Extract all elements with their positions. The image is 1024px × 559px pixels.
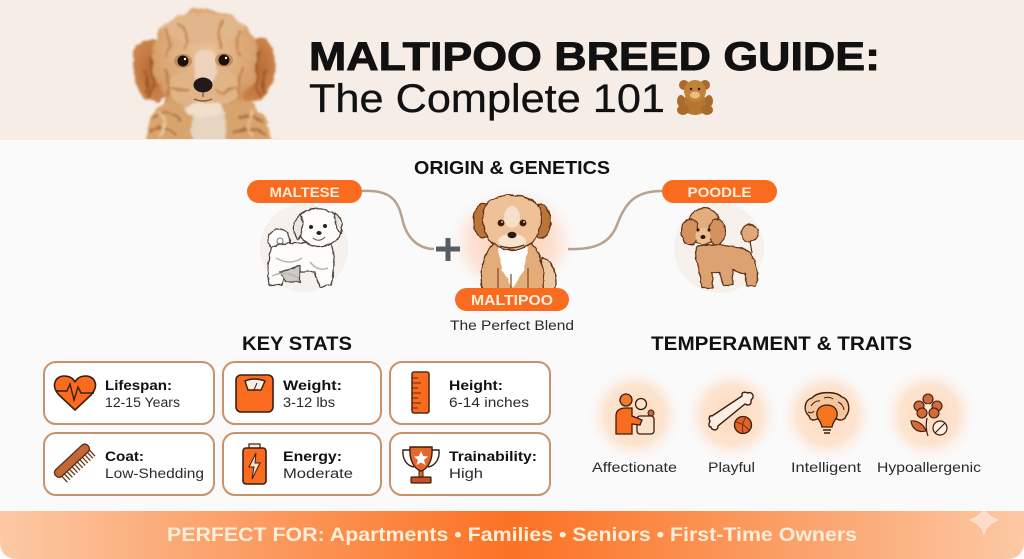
glow behind maltipoo xyxy=(452,190,574,294)
badge: maltese: MALTESE xyxy=(270,184,340,200)
icon: brain and light bulb xyxy=(787,375,867,455)
trait: intelligent: Intelligent xyxy=(791,459,861,475)
trait: affectionate: Affectionate xyxy=(592,459,677,475)
lifespan text: 12-15 Years xyxy=(105,395,180,410)
energy text xyxy=(283,448,353,481)
panel: maltese xyxy=(247,180,362,292)
icon: flower with no symbol xyxy=(889,375,969,455)
badge: poodle: POODLE xyxy=(688,184,752,200)
card: coat xyxy=(44,433,214,495)
caption: The Perfect Blend xyxy=(450,318,574,333)
icon: bone and ball xyxy=(692,375,772,455)
lifespan text xyxy=(105,377,180,410)
icon: comb xyxy=(53,442,97,485)
height text: Height: xyxy=(449,377,503,393)
lifespan text: Lifespan: xyxy=(105,377,172,393)
trait: intelligent xyxy=(787,375,867,475)
icon: trophy xyxy=(403,447,439,483)
trait: hypoallergenic: Hypoallergenic xyxy=(877,459,981,475)
plus sign xyxy=(436,238,460,261)
illustration: poodle dog xyxy=(674,203,764,293)
photo: maltipoo puppy xyxy=(129,10,279,145)
weight text: 3-12 lbs xyxy=(283,395,335,410)
trait: playful: Playful xyxy=(708,459,755,475)
trait: affectionate xyxy=(592,375,677,475)
trainability text: Trainability: xyxy=(449,448,537,464)
title: MALTIPOO BREED GUIDE: xyxy=(309,35,880,79)
icon: heart with pulse xyxy=(55,376,95,410)
energy text: Moderate xyxy=(283,466,353,481)
heading: key stats: KEY STATS xyxy=(242,334,352,355)
illustration: maltipoo dog xyxy=(474,195,556,290)
trait: playful xyxy=(692,375,772,475)
connector: maltese to plus xyxy=(362,191,434,249)
coat text xyxy=(105,448,204,481)
trainability text: High xyxy=(449,466,483,481)
height text xyxy=(449,377,529,410)
card: height xyxy=(390,362,550,424)
energy text: Energy: xyxy=(283,448,342,464)
title xyxy=(309,35,880,121)
icon: scale xyxy=(236,375,273,412)
card: energy xyxy=(223,433,381,495)
coat text: Coat: xyxy=(105,448,144,464)
heading: temperament and traits: TEMPERAMENT & TRAITS xyxy=(651,334,912,355)
heading: origin and genetics: ORIGIN & GENETICS xyxy=(414,158,610,178)
coat text: Low-Shedding xyxy=(105,466,204,481)
weight text xyxy=(283,377,342,410)
footer text: PERFECT FOR: Apartments • Families • Seniors • First-Time Owners xyxy=(167,525,857,546)
icon: battery xyxy=(243,444,266,484)
card: weight xyxy=(223,362,381,424)
trainability text xyxy=(449,448,537,481)
icon: sparkle xyxy=(968,505,1000,537)
card: trainability xyxy=(390,433,550,495)
panel: poodle xyxy=(662,180,777,293)
badge: maltipoo: MALTIPOO xyxy=(471,292,553,309)
header band xyxy=(0,0,1024,140)
icon: teddy bear xyxy=(677,80,713,115)
footer band xyxy=(0,511,1024,559)
trait: hypoallergenic xyxy=(877,375,981,475)
panel: maltipoo xyxy=(450,195,574,333)
icon: person hugging xyxy=(595,375,675,455)
illustration: maltese dog xyxy=(260,204,348,292)
height text: 6-14 inches xyxy=(449,395,529,410)
card: lifespan xyxy=(44,362,214,424)
weight text: Weight: xyxy=(283,377,342,393)
title: The Complete 101 xyxy=(309,77,665,121)
connector: maltipoo to poodle xyxy=(568,191,662,249)
icon: ruler xyxy=(412,372,429,413)
